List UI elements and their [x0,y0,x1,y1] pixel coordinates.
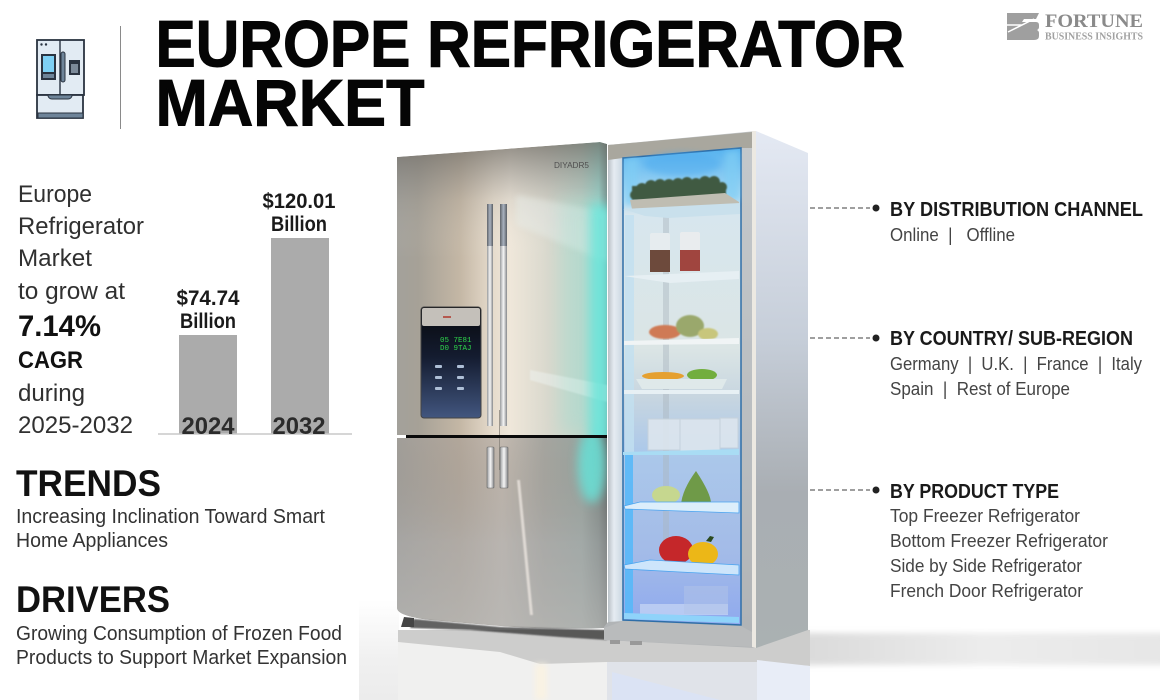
text: CAGR statement: 2025-2032 [18,412,133,439]
shelf 3 [624,338,739,345]
shelf 6 [624,502,739,513]
text: CAGR statement [18,181,144,439]
text: CAGR statement: 7.14% [18,310,101,343]
feet and shadow [401,617,607,640]
glass door refrigerator [604,131,808,648]
shelf 2 [624,271,739,283]
produce 1 [649,315,718,340]
title [156,6,904,140]
bar chart [158,190,352,440]
shelf 4 [624,390,739,394]
segment: product type: French Door Refrigerator [890,580,1083,601]
bar chart: 2024 [182,413,235,440]
logo: Fortune Business Insights: FORTUNE [1045,11,1143,32]
title: MARKET [156,66,424,140]
connector: country [810,334,880,342]
segment: product type: Side by Side Refrigerator [890,555,1082,576]
segment: product type: BY PRODUCT TYPE [890,481,1059,503]
trends: Increasing Inclination Toward Smart [16,506,325,528]
connector: distribution channel [810,204,880,212]
text: CAGR statement: to grow at [18,278,125,305]
text: CAGR statement: Market [18,245,92,272]
segment: product type: Bottom Freezer Refrigerator [890,530,1108,551]
segment: country: Spain | Rest of Europe [890,378,1070,399]
segment: distribution channel [890,199,1143,245]
logo: Fortune Business Insights: BUSINESS INSIGHTS [1045,32,1143,42]
floor [359,600,1160,700]
brand text: DIYADR5 [554,160,589,170]
icon: refrigerator [37,40,84,118]
bar chart: $74.74 [176,287,240,310]
produce 2 [636,369,727,389]
interior [623,148,741,625]
water dispenser panel: D0 9TAJ [440,345,472,353]
segment: country: BY COUNTRY/ SUB-REGION [890,328,1133,350]
connector: product type [810,486,880,494]
divider [120,26,122,129]
bar chart: Billion [180,310,236,333]
upper handles [487,204,507,426]
trends: Home Appliances [16,530,168,552]
drivers: Growing Consumption of Frozen Food [16,623,342,645]
trends [16,463,325,552]
segment: distribution channel: Online | Offline [890,224,1015,245]
logo: Fortune Business Insights [1007,11,1143,42]
shelf 7 [624,560,739,575]
side panel [756,131,808,648]
plants tray [630,176,739,209]
feet [610,640,642,645]
bar chart: $120.01 [262,190,336,213]
text: CAGR statement: Refrigerator [18,213,144,240]
text: CAGR statement: Europe [18,181,92,208]
segment: product type [890,481,1108,601]
shelf 1 [623,203,740,218]
water dispenser panel [421,307,481,418]
jars [650,232,700,272]
drivers: DRIVERS [16,579,170,620]
french door refrigerator [397,142,610,640]
text: CAGR statement: during [18,380,85,407]
segment: country [890,328,1143,399]
title: EUROPE REFRIGERATOR [156,6,904,80]
pear and broccoli [652,471,711,508]
segment: product type: Top Freezer Refrigerator [890,505,1080,526]
divider between sections [406,435,607,438]
containers [648,418,738,452]
bar chart: 2032 [272,413,326,440]
bar chart: Billion [271,213,327,236]
tomato and lemon [659,536,718,566]
lower doors [397,427,607,629]
front frame [604,131,756,648]
lower handles [487,447,508,488]
water dispenser panel: 05 7E81 [440,337,472,345]
bottom drawer [624,586,739,623]
drivers [16,579,347,669]
upper doors [397,142,610,445]
shelf 5 [623,449,739,455]
text: CAGR statement: CAGR [18,347,83,374]
drivers: Products to Support Market Expansion [16,647,347,669]
trends: TRENDS [16,463,161,504]
